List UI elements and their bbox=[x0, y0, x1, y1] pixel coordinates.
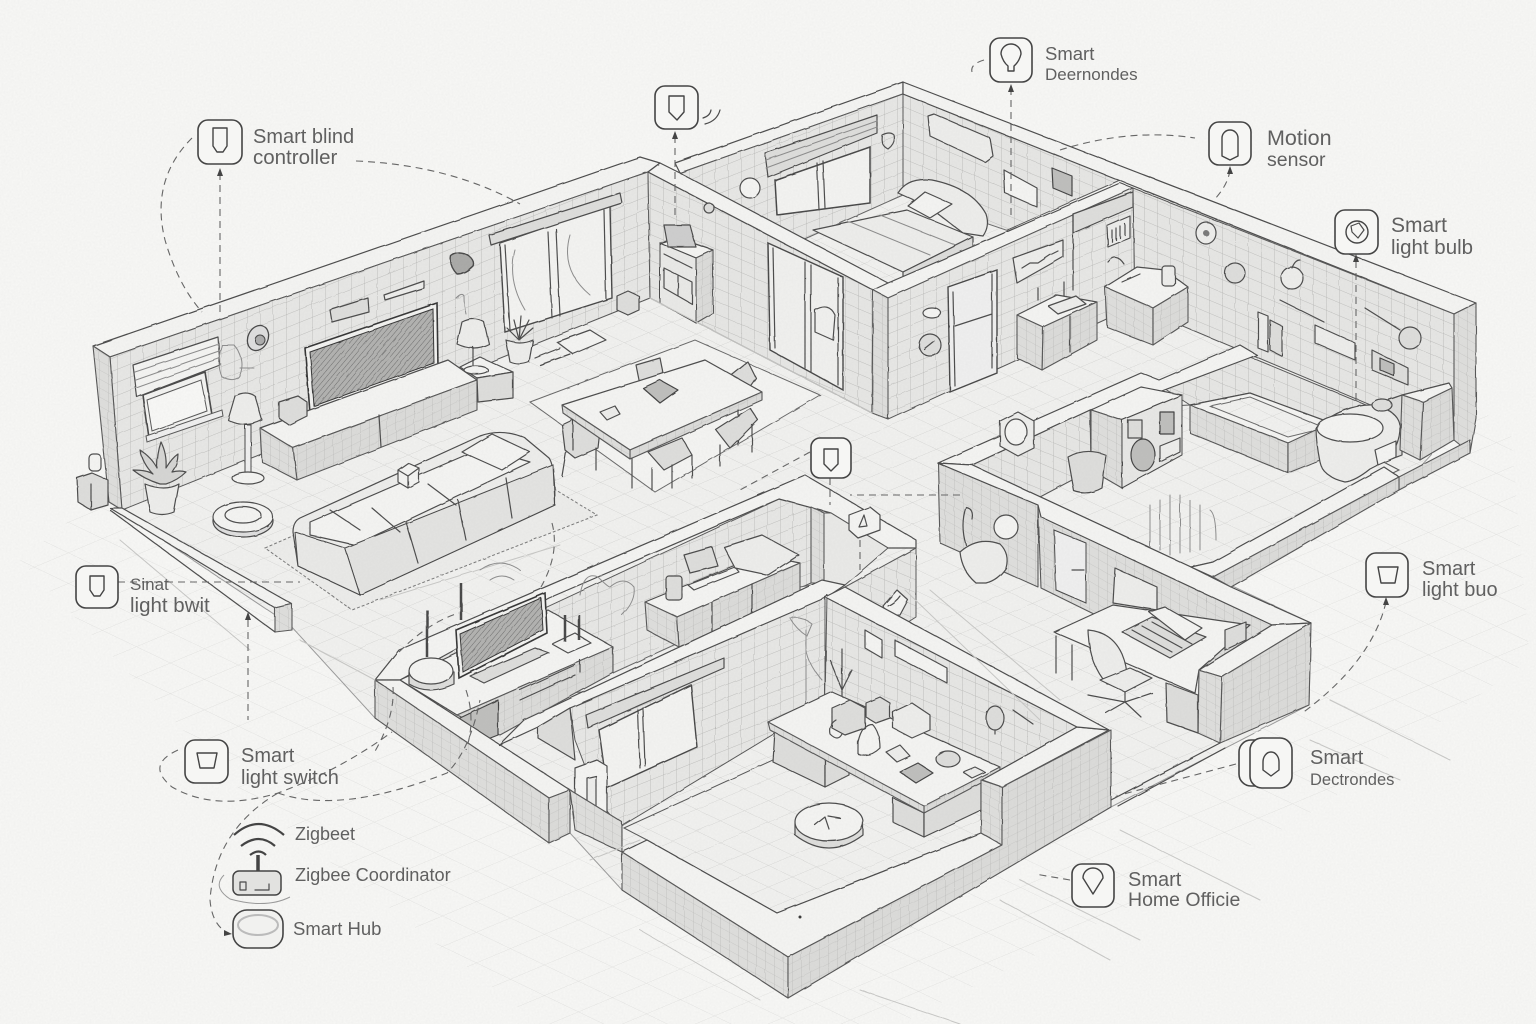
bedroom floor bbox=[780, 195, 1050, 290]
callout: Smart light bulb: light bulb bbox=[1391, 236, 1473, 259]
callout: Smart Home Officie: Smart bbox=[1128, 869, 1182, 891]
right long wall bbox=[903, 82, 1476, 453]
lower-left end wall bbox=[375, 680, 570, 843]
callout: Smart Dectrondes: Dectrondes bbox=[1310, 771, 1394, 789]
callout: Sinat light bwit bbox=[76, 566, 210, 617]
callout: Smart light switch: light switch bbox=[241, 767, 339, 789]
callout: centre sensor bbox=[811, 438, 851, 478]
connection lines bbox=[118, 60, 1389, 936]
toilet bbox=[1316, 395, 1402, 482]
bedroom wall devices bbox=[703, 133, 894, 213]
lower outer walls bbox=[570, 587, 1225, 998]
callout: Smart blind controller: Smart blind bbox=[253, 126, 354, 148]
wall controls, bedroom front wall bbox=[919, 240, 1063, 356]
television bbox=[305, 303, 438, 413]
plant by the door bbox=[506, 316, 533, 364]
callout: Smart Dectrondes bbox=[1239, 738, 1394, 789]
dining rug bbox=[530, 340, 820, 492]
label: Smart Hub: Smart Hub bbox=[293, 918, 381, 939]
lower room right wall bbox=[825, 595, 1077, 780]
dining set bbox=[562, 358, 762, 490]
ground grid around the house bbox=[20, 250, 1530, 1024]
callout: Smart blind controller: controller bbox=[253, 146, 337, 169]
callout: Smart light buo: Smart bbox=[1422, 558, 1476, 580]
washer bbox=[1091, 387, 1182, 488]
bedroom right wall bbox=[888, 94, 1120, 283]
label: Zigbee Coordinator: Zigbee Coordinator bbox=[295, 865, 451, 885]
bed bbox=[813, 180, 987, 278]
callout: Smart light switch: Smart bbox=[241, 745, 295, 767]
callout: Sinat light bwit: Sinat bbox=[130, 575, 169, 594]
callout: Smart Deernondes: Smart bbox=[1045, 43, 1094, 64]
callout: Smart Dectrondes: Smart bbox=[1310, 747, 1364, 769]
callout: Motion sensor: sensor bbox=[1267, 149, 1326, 171]
label: Zigbeet: Zigbeet bbox=[295, 824, 355, 844]
door in bedroom front wall bbox=[948, 270, 997, 392]
bedroom front wall bbox=[872, 183, 1135, 419]
icon: Zigbee signal arcs bbox=[234, 824, 284, 873]
rug under sofa bbox=[265, 450, 597, 610]
window with blind, left bbox=[133, 337, 223, 442]
study desk with objects bbox=[768, 618, 1000, 837]
sofa bbox=[293, 432, 555, 595]
callout: Motion sensor: Motion bbox=[1267, 126, 1332, 150]
floor: whole house bbox=[118, 190, 1454, 998]
round robot, lower room bbox=[795, 803, 863, 848]
partition wall: living to bedroom bbox=[648, 163, 888, 413]
floor sketch strokes bbox=[120, 298, 1450, 1024]
bathroom floor bbox=[972, 393, 1399, 567]
glazed door in partition bbox=[768, 243, 843, 390]
callout: Motion sensor bbox=[1209, 122, 1332, 171]
lower room back wall bbox=[499, 580, 845, 827]
icon: Zigbee coordinator box bbox=[219, 871, 290, 904]
media console bbox=[260, 360, 477, 480]
bedroom window with blind bbox=[765, 115, 877, 215]
sensor box at wing bbox=[849, 507, 880, 538]
floor box and tablet by the door bbox=[535, 291, 639, 365]
wifi arcs on floor bbox=[480, 563, 520, 580]
low cabinet with devices bbox=[1017, 282, 1097, 370]
lower room window bbox=[586, 658, 724, 788]
side table and table lamp bbox=[457, 319, 513, 402]
callout: Smart light switch bbox=[185, 740, 339, 789]
middle room end wing bbox=[811, 507, 916, 640]
callout: Smart light bulb bbox=[1335, 210, 1473, 259]
office chair bbox=[1088, 630, 1152, 717]
small device box, left bbox=[77, 454, 108, 510]
office end wall bbox=[1166, 623, 1311, 743]
wall dial bbox=[1000, 412, 1034, 456]
sideboard with devices bbox=[645, 535, 800, 647]
long low wall, bath to office bbox=[938, 463, 1399, 677]
callout: Smart blind controller bbox=[198, 120, 354, 169]
living room front curb bbox=[110, 508, 292, 632]
callout: Smart Deernondes: Deernondes bbox=[1045, 65, 1138, 84]
bath nook wall bbox=[1159, 357, 1366, 440]
small box on the lower room wall bbox=[575, 760, 607, 820]
icon: Smart Hub bbox=[233, 910, 283, 948]
callout: Sinat light bwit: light bwit bbox=[130, 594, 210, 617]
robot vacuum bbox=[213, 502, 273, 537]
callout: Smart light buo: light buo bbox=[1422, 579, 1498, 601]
bathtub bbox=[1190, 393, 1345, 473]
bedroom back wall bbox=[675, 82, 903, 250]
callout: top wireless sensor bbox=[655, 86, 720, 129]
callout: Smart light bulb: Smart bbox=[1391, 214, 1447, 237]
wall: back left bbox=[93, 157, 660, 510]
wall sensors right bbox=[1196, 222, 1324, 322]
callout: Smart light buo bbox=[1366, 553, 1498, 601]
mat on bathroom floor bbox=[1150, 495, 1216, 555]
callout: Smart Deernondes bbox=[990, 38, 1138, 84]
vase with stem bbox=[960, 507, 1018, 583]
cabinet with devices bbox=[660, 203, 714, 323]
plant, left bbox=[133, 442, 186, 514]
vanity sink bbox=[1105, 257, 1188, 345]
office desk with monitor bbox=[1054, 568, 1250, 693]
wall end by toilet bbox=[1399, 383, 1470, 490]
lower room floor bbox=[624, 703, 999, 913]
chart on pillar bbox=[1107, 216, 1130, 247]
middle room back wall bbox=[375, 475, 916, 700]
media unit and monitor bbox=[400, 576, 634, 748]
bathroom back low wall bbox=[938, 345, 1257, 497]
wall devices, living room bbox=[219, 253, 474, 380]
callout: Smart Home Officie: Home Officie bbox=[1128, 889, 1240, 911]
floor lamp bbox=[228, 393, 264, 484]
sliding door and curtain rail bbox=[489, 193, 622, 332]
wall air conditioner bbox=[928, 114, 1072, 207]
callout: Smart Home Officie bbox=[1072, 864, 1240, 911]
bathroom wall panels bbox=[1258, 308, 1421, 385]
bin bbox=[1068, 451, 1106, 493]
